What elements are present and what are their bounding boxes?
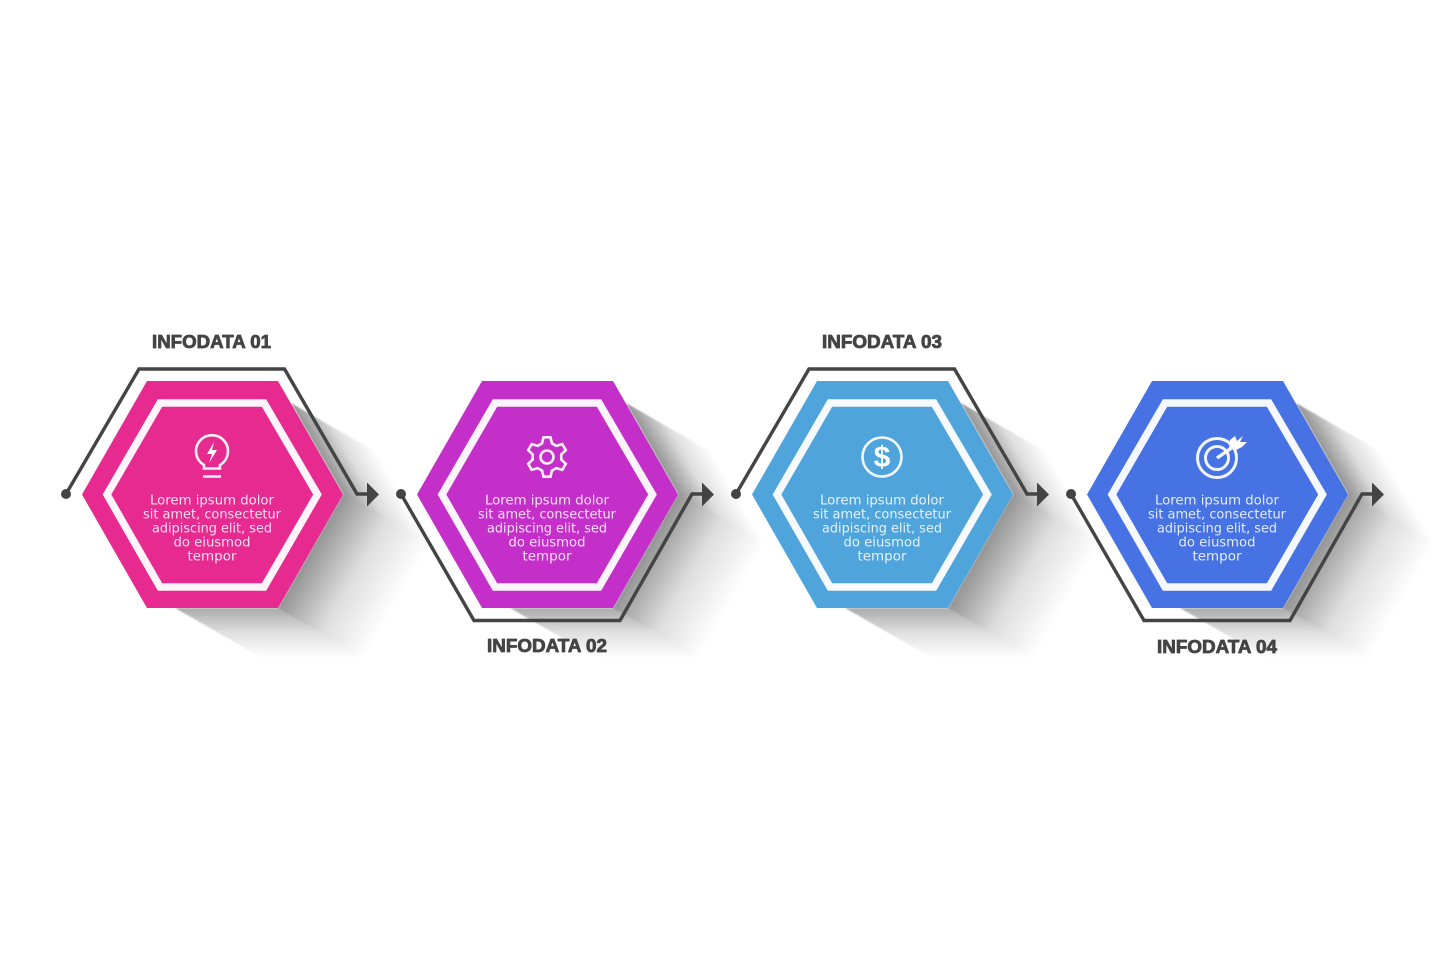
icon: gear	[528, 437, 566, 477]
description 02: adipiscing elit, sed	[487, 522, 607, 536]
description 04: adipiscing elit, sed	[1157, 522, 1277, 536]
hexagon 03	[752, 381, 1013, 608]
description 02: Lorem ipsum dolor	[485, 494, 609, 508]
inner hexagon outline 02	[442, 403, 652, 587]
panel: infodata 01	[61, 332, 430, 658]
description 04: Lorem ipsum dolor	[1155, 494, 1279, 508]
heading 03: INFODATA 03	[822, 332, 942, 352]
description 01	[143, 494, 281, 564]
panel: infodata 02	[396, 381, 765, 658]
heading 02: INFODATA 02	[487, 636, 607, 656]
connector line with dot and arrow 02	[396, 482, 714, 620]
inner hexagon outline 01	[107, 403, 318, 587]
description 04: tempor	[1192, 550, 1242, 564]
panel: infodata 04	[1066, 381, 1435, 658]
description 04	[1148, 494, 1286, 564]
description 02: do eiusmod	[508, 536, 586, 550]
hexagon 04	[1087, 381, 1348, 608]
long shadow 01	[175, 403, 430, 658]
long shadow 04	[1180, 403, 1435, 658]
hexagon 01	[82, 381, 343, 608]
description 02: tempor	[522, 550, 572, 564]
description 01: adipiscing elit, sed	[152, 522, 272, 536]
description 03: adipiscing elit, sed	[822, 522, 942, 536]
description 03: Lorem ipsum dolor	[820, 494, 944, 508]
inner hexagon outline 03	[777, 403, 988, 587]
description 01: Lorem ipsum dolor	[150, 494, 274, 508]
description 02	[478, 494, 616, 564]
hexagon 02	[417, 381, 678, 608]
long shadow 03	[845, 403, 1100, 658]
description 01: do eiusmod	[174, 536, 250, 550]
heading 01: INFODATA 01	[152, 332, 271, 352]
inner hexagon outline 04	[1112, 403, 1322, 587]
long shadow 02	[510, 403, 765, 658]
icon: dollar coin: $	[874, 441, 891, 474]
connector line with dot and arrow 03	[731, 369, 1049, 506]
description 03: do eiusmod	[844, 536, 920, 550]
connector line with dot and arrow 01	[61, 369, 379, 506]
description 03	[813, 494, 951, 564]
description 01: sit amet, consectetur	[143, 508, 281, 522]
description 01: tempor	[188, 550, 237, 564]
icon: dollar coin	[862, 438, 902, 476]
description 04: do eiusmod	[1178, 536, 1256, 550]
description 03: tempor	[858, 550, 907, 564]
description 02: sit amet, consectetur	[478, 508, 616, 522]
panel: infodata 03	[731, 332, 1100, 658]
description 04: sit amet, consectetur	[1148, 508, 1286, 522]
heading 04: INFODATA 04	[1157, 637, 1277, 657]
icon: light bulb	[196, 435, 228, 476]
description 03: sit amet, consectetur	[813, 508, 951, 522]
connector line with dot and arrow 04	[1066, 482, 1384, 620]
icon: target with arrow	[1198, 436, 1247, 478]
